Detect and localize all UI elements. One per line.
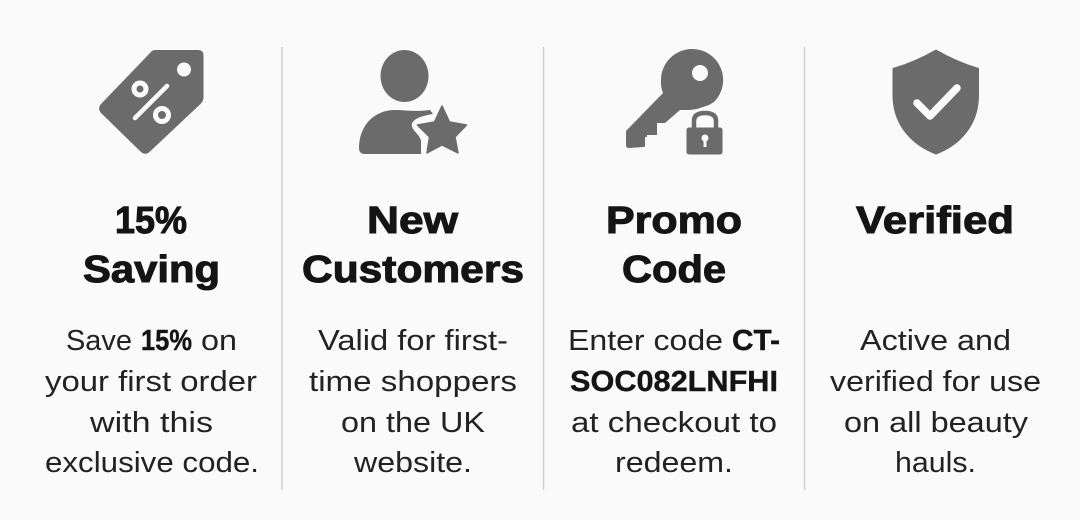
- text: verified description: [830, 325, 1041, 479]
- text: customers description: on the UK: [341, 407, 486, 439]
- panel: new customers: [302, 50, 524, 479]
- icon: shield with check: [893, 50, 978, 154]
- icon: percent price tag: [99, 50, 204, 154]
- text: promo code description: CT-: [732, 325, 780, 357]
- text: customers description: website.: [353, 447, 472, 479]
- text: saving description: [45, 325, 259, 479]
- text: promo code description: Enter code: [568, 325, 723, 357]
- heading: 15% Saving: [83, 200, 220, 291]
- text: saving description: Save: [66, 325, 132, 357]
- heading: 15% Saving: 15%: [115, 200, 187, 242]
- heading: New Customers: Customers: [302, 249, 524, 291]
- heading: Promo Code: [606, 200, 742, 291]
- heading: 15% Saving: Saving: [83, 249, 220, 291]
- heading: New Customers: [302, 200, 524, 291]
- text: verified description: Active and: [860, 325, 1011, 357]
- text: promo code description: [568, 325, 780, 479]
- panel: verified: [830, 50, 1041, 479]
- text: saving description: exclusive code.: [45, 447, 259, 479]
- heading: Verified: Verified: [856, 200, 1014, 242]
- text: promo code description: at checkout to: [571, 407, 777, 439]
- icon: key with padlock: [626, 49, 723, 154]
- text: promo code description: SOC082LNFHI: [570, 366, 778, 398]
- text: verified description: hauls.: [895, 447, 976, 479]
- text: saving description: your first order: [45, 366, 257, 398]
- heading: New Customers: New: [367, 200, 459, 242]
- text: saving description: 15%: [141, 325, 192, 357]
- panel: 15% saving: [45, 50, 259, 479]
- heading: Promo Code: Promo: [606, 200, 742, 242]
- text: promo code description: redeem.: [615, 447, 733, 479]
- text: verified description: verified for use: [830, 366, 1041, 398]
- text: customers description: time shoppers: [309, 366, 517, 398]
- panel: promo code: [568, 49, 780, 479]
- text: customers description: [309, 325, 517, 479]
- icon: person with star: [359, 50, 466, 154]
- heading: Promo Code: Code: [622, 249, 726, 291]
- text: saving description: with this: [89, 407, 213, 439]
- text: verified description: on all beauty: [844, 407, 1029, 439]
- text: customers description: Valid for first-: [318, 325, 508, 357]
- text: saving description: on: [201, 325, 237, 357]
